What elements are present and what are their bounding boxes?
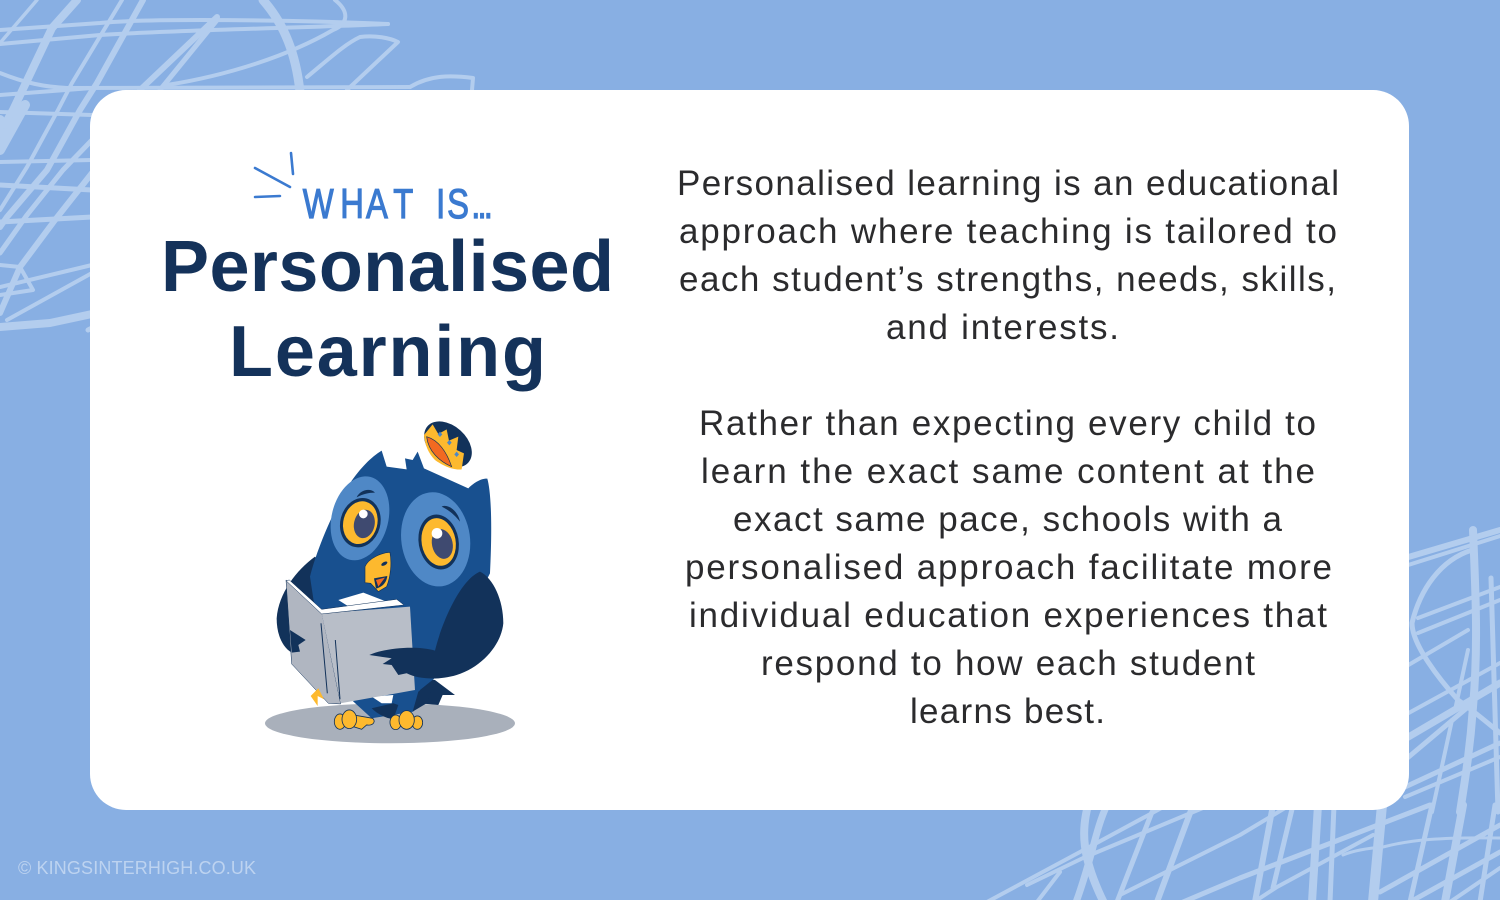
title line 1: Personalised <box>161 227 614 307</box>
footer: copyright: © KINGSINTERHIGH.CO.UK <box>18 858 256 878</box>
kicker: what is: WHAT IS... <box>303 180 493 227</box>
ground shadow <box>265 703 515 743</box>
text block: explanation: individual education experiences that <box>689 596 1327 635</box>
tail feathers <box>410 677 455 705</box>
text block: explanation: respond to how each student <box>761 644 1255 683</box>
panel: white card <box>90 90 1409 810</box>
left wing <box>277 557 330 653</box>
icon: emphasis dashes <box>255 153 293 197</box>
feet <box>334 710 423 730</box>
text block: explanation: learns best. <box>910 692 1105 731</box>
title line 2: Learning <box>229 312 546 392</box>
beak <box>365 552 391 592</box>
text block: explanation: Rather than expecting every child to <box>699 404 1316 443</box>
heading: what is personalised learning <box>161 153 614 392</box>
text block: explanation <box>685 404 1332 731</box>
text block: explanation: personalised approach facilitate more <box>685 548 1332 587</box>
text block: explanation: learn the exact same content at the <box>701 452 1315 491</box>
text block: definition: and interests. <box>886 308 1119 347</box>
text block: definition: Personalised learning is an educational <box>677 164 1339 203</box>
text block: explanation: exact same pace, schools with a <box>733 500 1283 539</box>
text block: definition: each student’s strengths, needs, skills, <box>679 260 1336 299</box>
crown <box>415 412 481 476</box>
body <box>310 451 491 718</box>
text block: definition <box>677 164 1339 347</box>
illustration: owl reading a book <box>265 412 515 743</box>
left eye <box>322 470 398 567</box>
left hand <box>290 630 306 653</box>
legs shadow <box>372 681 435 719</box>
text block: definition: approach where teaching is tailored to <box>679 212 1337 251</box>
right wing <box>369 572 503 679</box>
book <box>286 580 415 706</box>
right eye <box>395 488 476 591</box>
